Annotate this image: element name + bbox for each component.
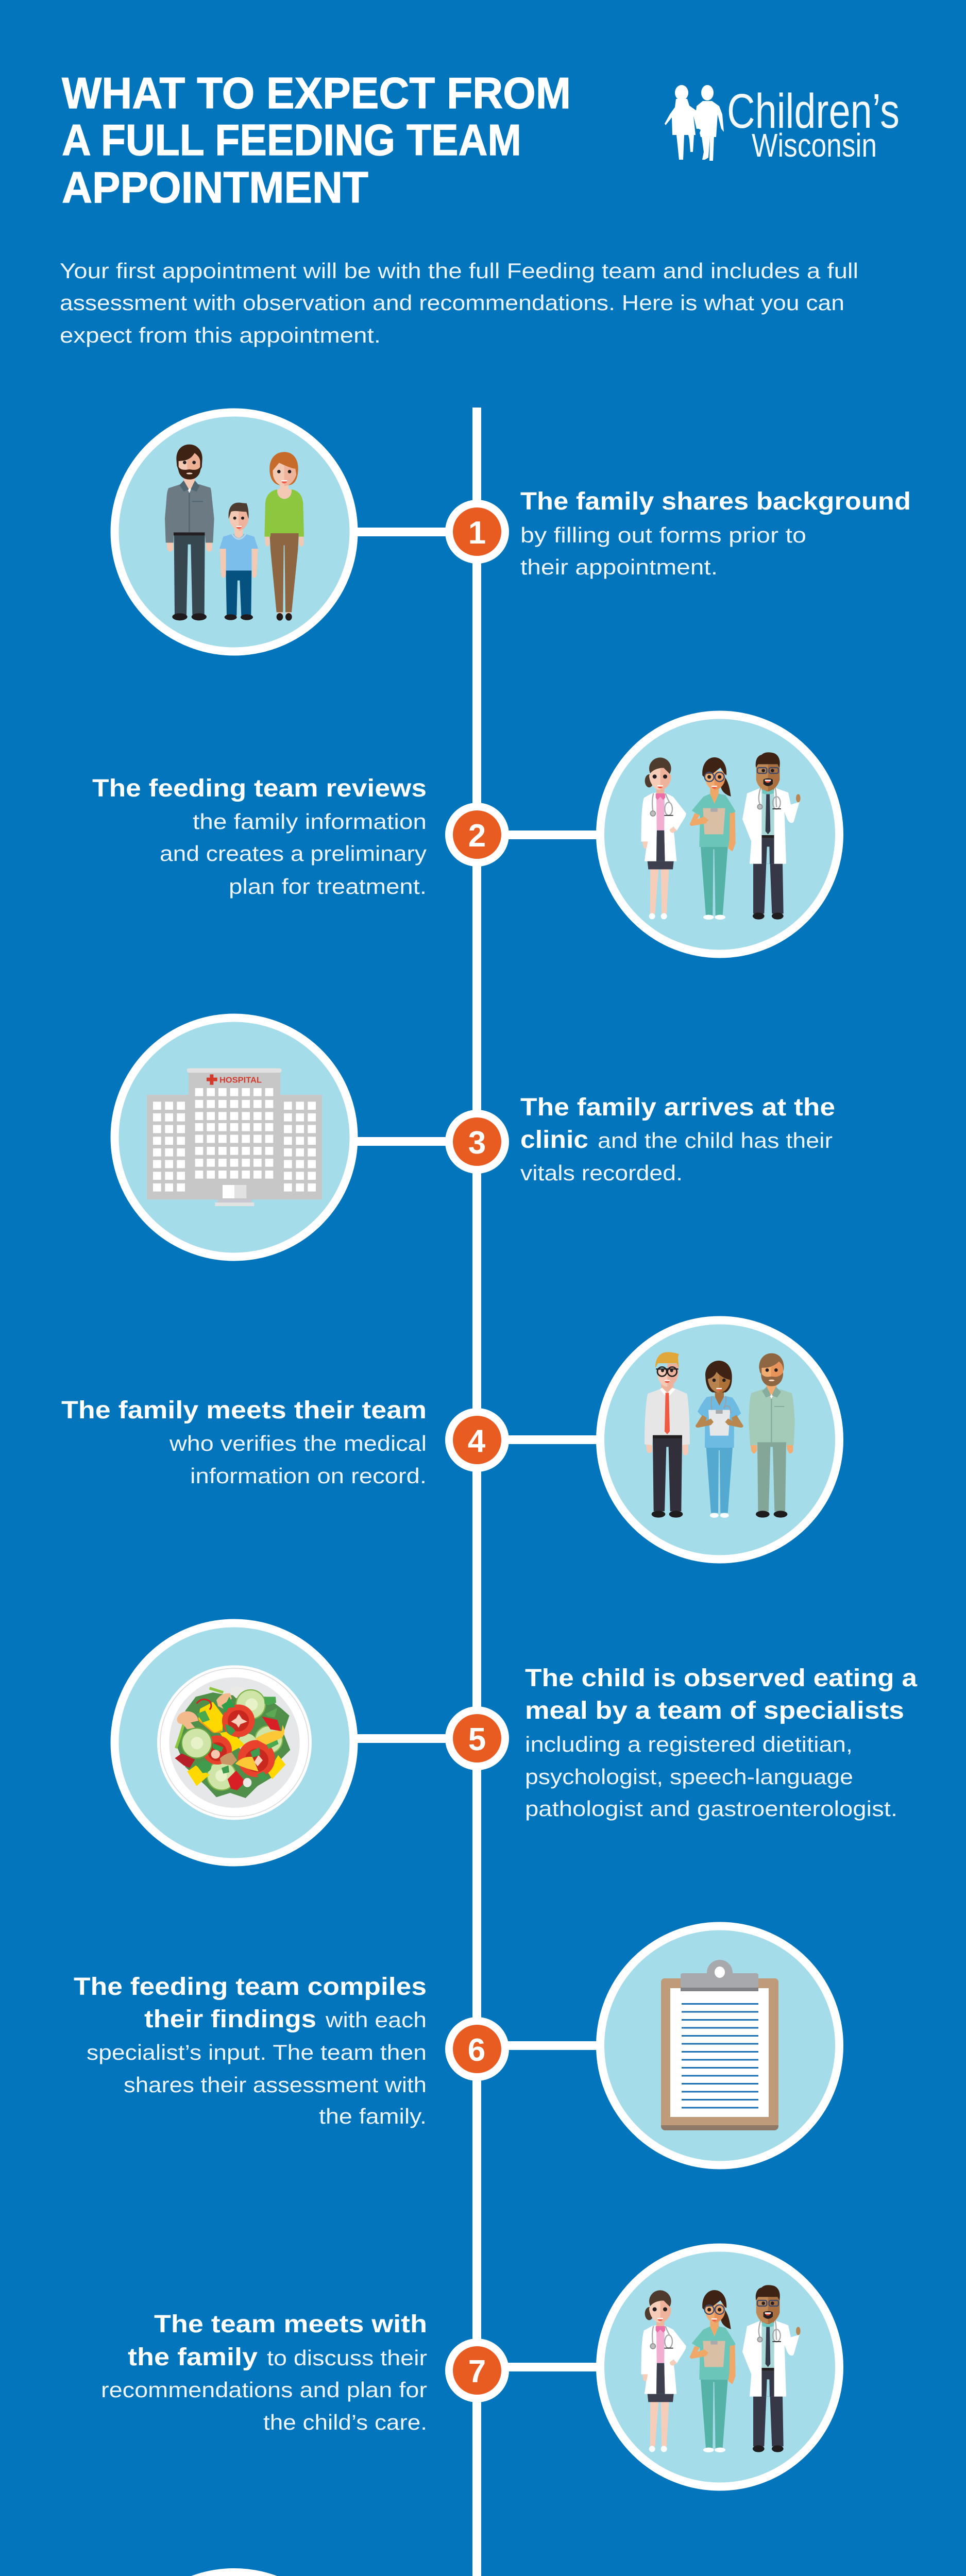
step 4 text: who verifies the medical <box>169 1431 427 1455</box>
step 3 <box>114 1018 835 1257</box>
salad <box>175 1687 290 1798</box>
number badge 4: 4 <box>468 1423 486 1459</box>
step 3 text <box>520 1094 835 1185</box>
step 7 text: recommendations and plan for <box>101 2378 427 2402</box>
step 2 <box>92 715 839 954</box>
step 5 <box>114 1623 917 1862</box>
hospital sign <box>207 1074 262 1085</box>
logo: Children's Wisconsin: Wisconsin <box>752 127 877 164</box>
illustration circle: care team <box>600 2247 839 2486</box>
step 5 text: including a registered dietitian, <box>525 1732 853 1756</box>
hospital sign: HOSPITAL <box>219 1076 262 1084</box>
illustration circle: family team <box>600 1320 839 1559</box>
connector 2 <box>507 831 600 839</box>
title: APPOINTMENT <box>62 163 368 212</box>
step 1 text: their appointment. <box>520 555 718 579</box>
step 5 text: psychologist, speech-language <box>525 1765 853 1789</box>
connector 6 <box>507 2041 600 2050</box>
title: A FULL FEEDING TEAM <box>62 116 521 165</box>
clipboard <box>661 1960 778 2130</box>
step 1 <box>114 412 911 651</box>
logo: Children's Wisconsin: Children’s <box>727 84 900 139</box>
step 7 text <box>101 2311 427 2434</box>
number badge 3: 3 <box>468 1125 486 1161</box>
windows <box>153 1088 316 1192</box>
step 1 text <box>520 488 911 579</box>
illustration circle: family <box>114 412 353 651</box>
step 5 text: The child is observed eating a <box>525 1665 917 1692</box>
door and steps <box>215 1185 254 1206</box>
logo: Children's Wisconsin <box>665 84 900 164</box>
number badge 7 <box>449 2342 505 2399</box>
intro text: expect from this appointment. <box>60 323 381 347</box>
step 1 text: by filling out forms prior to <box>520 523 806 547</box>
step 2 text: and creates a preliminary <box>160 841 427 866</box>
step 6 text <box>74 1973 427 2128</box>
number badge 2 <box>449 807 505 862</box>
step 6 text: with each <box>325 2008 427 2032</box>
figure: father <box>165 445 214 620</box>
illustration circle: hospital <box>114 1018 353 1257</box>
step 6 text: specialist’s input. The team then <box>87 2040 427 2064</box>
step 7 text: the family <box>128 2344 258 2371</box>
figure: woman doctor <box>641 757 686 919</box>
number badge 6 <box>449 2021 505 2077</box>
icon: two children silhouette <box>665 85 724 161</box>
timeline spine <box>472 408 481 2576</box>
number badge 5 <box>449 1710 505 1766</box>
step 2 text: The feeding team reviews <box>92 775 427 802</box>
connector 5 <box>355 1734 448 1743</box>
step 6 <box>74 1926 839 2165</box>
step 3 text: and the child has their <box>598 1128 833 1153</box>
step 3 text: vitals recorded. <box>520 1161 683 1185</box>
step 1 text: The family shares background <box>520 488 911 515</box>
connector 4 <box>507 1435 600 1444</box>
step 2 text: plan for treatment. <box>229 874 427 899</box>
step 6 text: the family. <box>319 2104 427 2128</box>
number badge 1 <box>449 504 505 560</box>
step 4 text: The family meets their team <box>61 1397 427 1424</box>
step 6 text: their findings <box>144 2006 316 2033</box>
number badge 4 <box>449 1412 505 1468</box>
title: WHAT TO EXPECT FROM <box>62 69 571 118</box>
step 5 text: pathologist and gastroenterologist. <box>525 1797 897 1821</box>
step 6 text: shares their assessment with <box>124 2073 427 2097</box>
illustration circle: salad <box>114 1623 353 1862</box>
illustration circle: documents <box>114 2572 353 2576</box>
step 3 text: clinic <box>520 1126 588 1154</box>
illustration circle: care team <box>600 715 839 954</box>
step 7 text: the child’s care. <box>263 2410 427 2434</box>
step 6 text: The feeding team compiles <box>74 1973 427 2001</box>
step 7 <box>101 2247 839 2486</box>
connector 3 <box>355 1137 448 1146</box>
figure: nurse <box>696 1361 743 1518</box>
figure: mother <box>264 452 304 621</box>
step 2 text: the family information <box>193 809 427 834</box>
connector 1 <box>355 528 448 536</box>
step 5 text: meal by a team of specialists <box>525 1697 904 1724</box>
number badge 1: 1 <box>468 515 486 551</box>
step 7 text: to discuss their <box>267 2346 427 2370</box>
figure: man with beard <box>749 1353 795 1518</box>
step 4 text: information on record. <box>190 1464 427 1488</box>
number badge 3 <box>449 1114 505 1170</box>
figure: male doctor <box>742 752 801 920</box>
title <box>62 69 571 212</box>
illustration circle: clipboard <box>600 1926 839 2165</box>
number badge 2: 2 <box>468 818 486 854</box>
plate <box>157 1665 312 1820</box>
figure: man with tie <box>645 1352 690 1518</box>
number badge 5: 5 <box>468 1722 486 1757</box>
connector 7 <box>507 2363 600 2371</box>
intro text: Your first appointment will be with the full Feeding team and includes a full <box>60 259 858 283</box>
step 3 text: The family arrives at the <box>520 1094 835 1121</box>
number badge 7: 7 <box>468 2354 486 2389</box>
intro text <box>60 259 858 347</box>
figure: child <box>219 503 258 620</box>
step 8 <box>114 2572 832 2576</box>
step 4 <box>61 1320 839 1559</box>
number badge 6: 6 <box>468 2032 485 2068</box>
figure: nurse with clipboard <box>690 757 736 920</box>
step 4 text <box>61 1397 427 1488</box>
intro text: assessment with observation and recommendations. Here is what you can <box>60 291 844 315</box>
step 5 text <box>525 1665 917 1821</box>
step 7 text: The team meets with <box>154 2311 427 2338</box>
step 2 text <box>92 775 427 899</box>
